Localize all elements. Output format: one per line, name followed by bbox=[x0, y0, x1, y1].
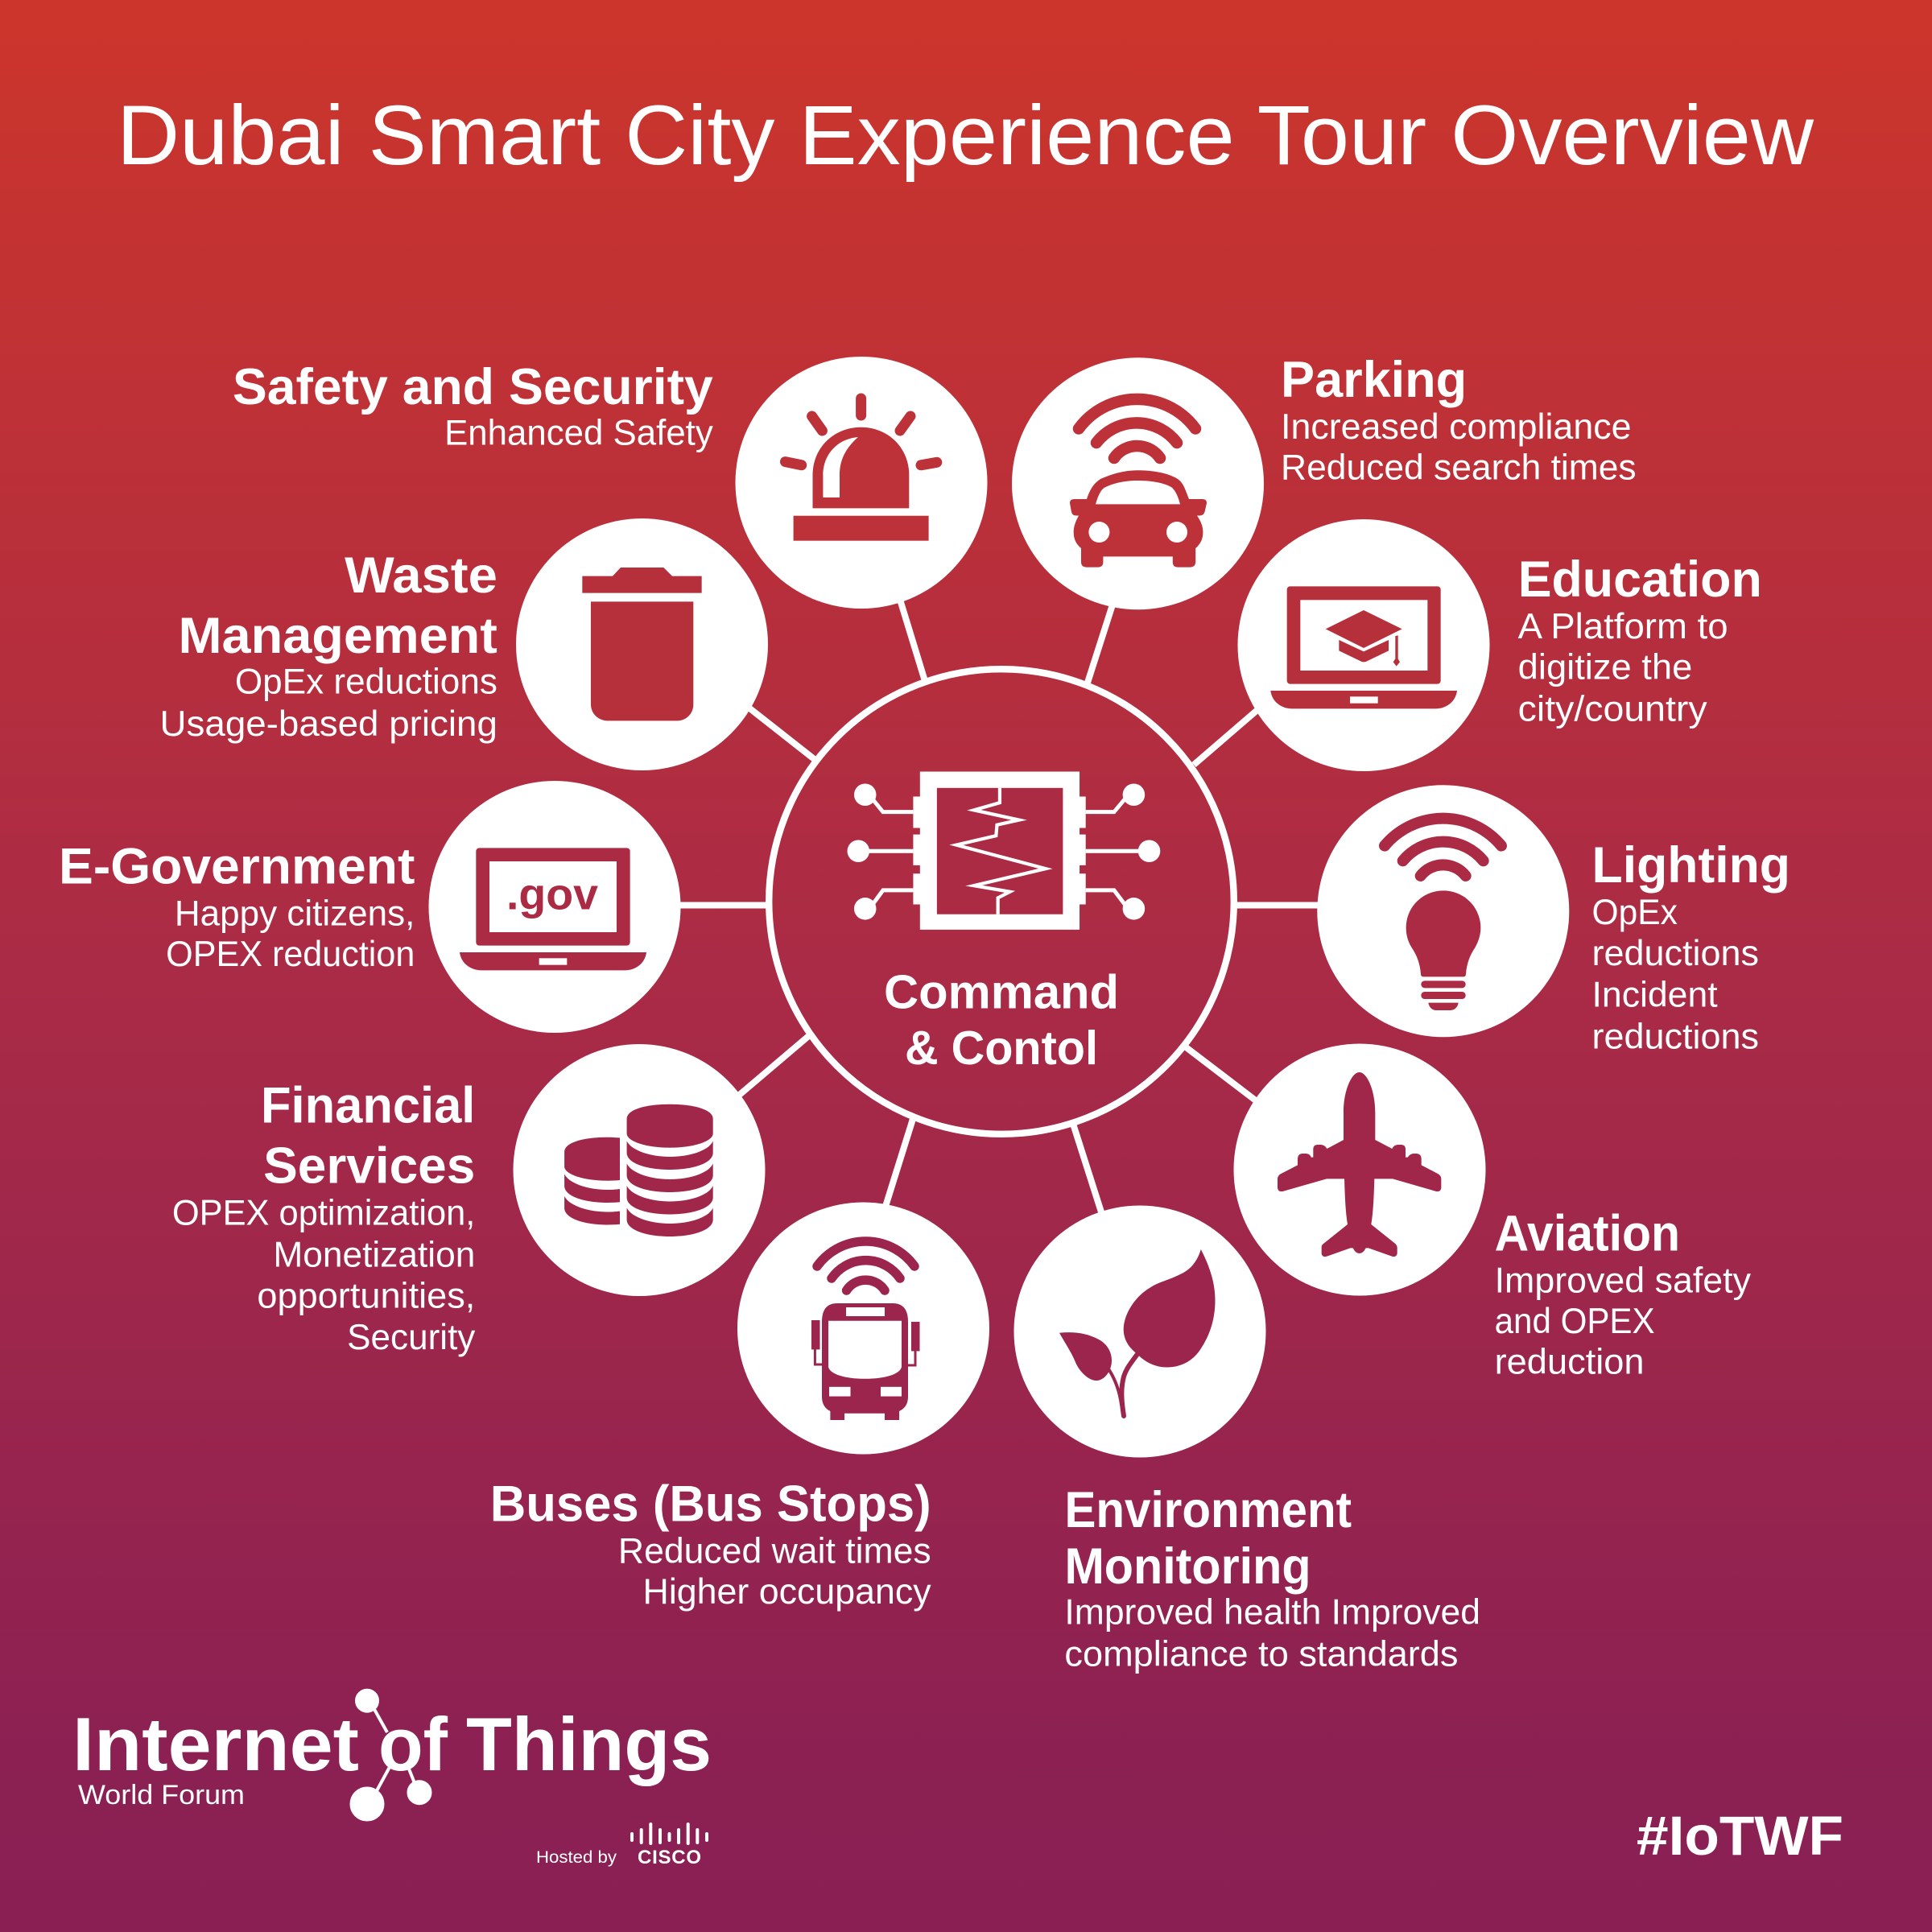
heading: Parking bbox=[1281, 352, 1467, 408]
node circle bbox=[516, 518, 768, 770]
label bbox=[172, 1077, 475, 1357]
heading: Lighting bbox=[1592, 837, 1790, 894]
description: Improved health Improved bbox=[1064, 1592, 1480, 1632]
description: OpEx reductions bbox=[235, 663, 497, 702]
panel: command and control hub bbox=[769, 669, 1234, 1134]
connector bbox=[1194, 704, 1264, 765]
description: Increased compliance bbox=[1281, 407, 1632, 447]
connector bbox=[1185, 1046, 1260, 1104]
heading: Waste bbox=[345, 547, 497, 604]
cisco bars bbox=[632, 1824, 707, 1843]
icon: coin stacks bbox=[564, 1104, 713, 1236]
hub label: & Contol bbox=[905, 1022, 1098, 1075]
description: Usage-based pricing bbox=[160, 704, 497, 744]
connector bbox=[672, 902, 767, 908]
node circle bbox=[737, 1203, 989, 1454]
description: reductions bbox=[1592, 1018, 1759, 1057]
panel: financial services bbox=[172, 1034, 811, 1357]
description bbox=[1518, 607, 1728, 729]
subtitle: World Forum bbox=[78, 1780, 245, 1810]
heading: Financial bbox=[261, 1077, 475, 1133]
label bbox=[1495, 1206, 1751, 1382]
description: OPEX optimization, bbox=[172, 1193, 475, 1232]
description: Enhanced Safety bbox=[444, 414, 713, 453]
heading: Monitoring bbox=[1064, 1538, 1311, 1595]
description bbox=[166, 894, 415, 974]
node circle bbox=[1238, 519, 1489, 771]
connector bbox=[898, 592, 925, 681]
description bbox=[160, 663, 497, 744]
wordmark: Internet bbox=[72, 1702, 359, 1786]
heading: Services bbox=[263, 1137, 475, 1194]
panel: lighting bbox=[1236, 785, 1790, 1057]
description: Higher occupancy bbox=[643, 1572, 931, 1612]
heading bbox=[261, 1077, 475, 1194]
panel: environment monitoring bbox=[1014, 1124, 1480, 1674]
icon: connected car bbox=[1070, 399, 1207, 568]
title: Dubai Smart City Experience Tour Overview bbox=[117, 89, 1814, 183]
description: OPEX reduction bbox=[166, 935, 415, 974]
logo: Internet of Things World Forum bbox=[72, 1690, 712, 1819]
description: Incident bbox=[1592, 976, 1718, 1015]
label bbox=[1281, 352, 1637, 487]
heading: Safety and Security bbox=[233, 359, 713, 415]
description: opportunities, bbox=[257, 1277, 475, 1316]
heading: Aviation bbox=[1495, 1206, 1680, 1262]
label bbox=[1064, 1482, 1480, 1674]
node circle bbox=[1317, 785, 1569, 1037]
description: Reduced wait times bbox=[618, 1532, 931, 1571]
panel: education bbox=[1194, 519, 1762, 771]
description: Security bbox=[347, 1318, 475, 1357]
description bbox=[1281, 407, 1637, 487]
description: compliance to standards bbox=[1064, 1634, 1458, 1674]
heading bbox=[178, 547, 497, 664]
connector bbox=[1088, 600, 1114, 683]
description: Improved safety bbox=[1495, 1261, 1751, 1301]
node circle bbox=[736, 357, 987, 609]
wordmark bbox=[72, 1702, 712, 1786]
heading: Management bbox=[178, 608, 497, 664]
heading bbox=[1064, 1482, 1352, 1595]
heading: Buses (Bus Stops) bbox=[490, 1476, 931, 1533]
wordmark: Things bbox=[466, 1702, 712, 1786]
cisco wordmark: CISCO bbox=[638, 1847, 701, 1868]
description: OpEx bbox=[1592, 893, 1678, 932]
node circle bbox=[514, 1044, 765, 1296]
heading: E-Government bbox=[59, 838, 415, 894]
label bbox=[490, 1476, 931, 1612]
connector bbox=[884, 1119, 913, 1212]
hub label: Command bbox=[884, 966, 1119, 1019]
description: Reduced search times bbox=[1281, 448, 1637, 487]
icon: chip bbox=[848, 772, 1160, 930]
label bbox=[59, 838, 415, 974]
panel: e-government bbox=[59, 781, 767, 1033]
icon: connected bus bbox=[811, 1241, 919, 1420]
description bbox=[172, 1193, 475, 1357]
panel: waste management bbox=[160, 518, 816, 770]
description bbox=[1592, 893, 1759, 1057]
panel: aviation bbox=[1185, 1043, 1751, 1382]
icon: trash bin bbox=[582, 568, 702, 720]
icon: laptop with graduation cap bbox=[1270, 586, 1457, 708]
node circle bbox=[428, 781, 681, 1033]
icon: airplane bbox=[1278, 1072, 1441, 1257]
icon: laptop with .gov: .gov bbox=[506, 869, 598, 919]
description: A Platform to bbox=[1518, 607, 1728, 646]
description: city/country bbox=[1518, 689, 1707, 729]
icon: laptop with .gov bbox=[460, 848, 646, 970]
hashtag: #IoTWF bbox=[1637, 1805, 1843, 1867]
description: reductions bbox=[1592, 934, 1759, 973]
description: reduction bbox=[1495, 1343, 1645, 1382]
icon: plant leaves bbox=[1059, 1249, 1216, 1416]
hub ring bbox=[769, 669, 1234, 1134]
connector bbox=[745, 704, 816, 761]
label bbox=[1518, 551, 1762, 729]
description: digitize the bbox=[1518, 647, 1692, 687]
heading: Education bbox=[1518, 551, 1762, 608]
description: Happy citizens, bbox=[175, 894, 415, 933]
label bbox=[1592, 837, 1790, 1057]
heading: Environment bbox=[1064, 1482, 1352, 1538]
node circle bbox=[1233, 1043, 1486, 1296]
node circle bbox=[1012, 357, 1264, 609]
label bbox=[233, 359, 713, 453]
description bbox=[1064, 1592, 1480, 1674]
node circle bbox=[1014, 1206, 1265, 1457]
label bbox=[160, 547, 497, 744]
connector bbox=[1073, 1124, 1104, 1220]
connector bbox=[737, 1034, 811, 1097]
description bbox=[618, 1532, 931, 1612]
panel: safety and security bbox=[233, 357, 987, 681]
hub label bbox=[884, 966, 1119, 1075]
wordmark: of bbox=[378, 1702, 448, 1786]
description: Monetization bbox=[273, 1235, 475, 1274]
hosted by text: Hosted by bbox=[536, 1848, 617, 1867]
logo: hosted by cisco bbox=[536, 1824, 707, 1868]
panel: parking bbox=[1012, 352, 1637, 683]
connector bbox=[1236, 902, 1328, 908]
icon: alarm beacon bbox=[786, 398, 937, 541]
logo network nodes bbox=[351, 1690, 430, 1819]
icon: smart bulb bbox=[1385, 819, 1501, 1010]
description: and OPEX bbox=[1495, 1302, 1655, 1341]
panel: buses bbox=[490, 1119, 989, 1612]
description bbox=[1495, 1261, 1751, 1382]
